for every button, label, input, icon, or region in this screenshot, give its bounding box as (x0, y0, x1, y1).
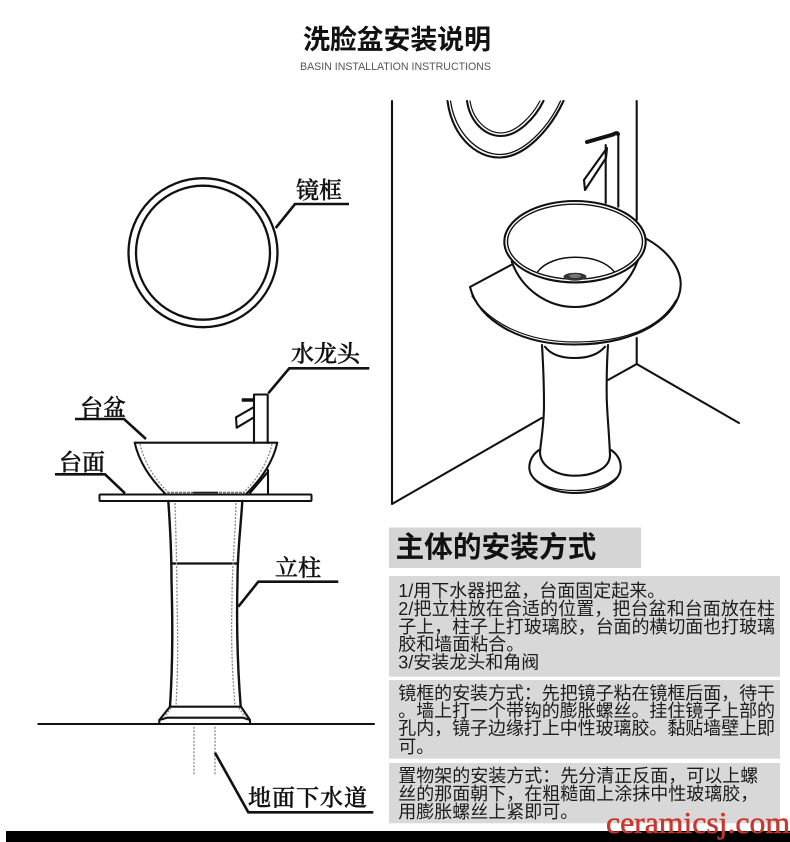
panel: mirror frame installation: 。墙上打一个带钩的膨胀螺丝。挂住镜子上部的 (398, 701, 775, 721)
panel: main body steps: 1/用下水器把盆，台面固定起来。 (398, 581, 665, 601)
panel: shelf installation: 丝的那面朝下，在粗糙面上涂抹中性玻璃胶， (398, 784, 758, 804)
panel: main body steps: 3/安装龙头和角阀 (398, 652, 539, 672)
mirror frame diagram (128, 178, 349, 327)
panel: main body steps (389, 576, 780, 677)
panel: main body steps: 子上，柱子上打玻璃胶，台面的横切面也打玻璃 (398, 617, 775, 637)
panel: shelf installation (389, 763, 780, 823)
panel: mirror frame installation: 可。 (398, 737, 434, 757)
page title: 洗脸盆安装说明 (303, 25, 491, 55)
countertop (470, 239, 681, 345)
label: mirror frame (276, 178, 349, 228)
drain pipes (194, 727, 215, 775)
label: column (238, 556, 338, 607)
subtitle: BASIN INSTALLATION INSTRUCTIONS (300, 61, 491, 73)
label: countertop: 台面 (59, 450, 105, 475)
pedestal column (159, 501, 250, 724)
perspective view: installed basin (392, 101, 739, 504)
panel: main body steps: 胶和墙面粘合。 (398, 634, 524, 654)
heading panel: main body installation: 主体的安装方式 (396, 532, 597, 564)
front view diagram: pedestal basin (38, 342, 374, 812)
panel: shelf installation: 用膨胀螺丝上紧即可。 (398, 802, 578, 822)
label: floor drain: 地面下水道 (248, 786, 367, 810)
room walls and floor (392, 101, 739, 504)
panel: main body steps: 2/把立柱放在合适的位置，把台盆和台面放在柱 (398, 599, 775, 619)
label: faucet (268, 342, 369, 393)
faucet (584, 133, 618, 207)
basin bowl (504, 201, 646, 307)
watermark: ceramicsj.com (606, 805, 790, 840)
heading panel: main body installation (389, 528, 641, 568)
label: basin (75, 396, 146, 439)
wall mirror (448, 101, 564, 158)
label: faucet: 水龙头 (291, 342, 361, 366)
basin bowl (135, 443, 277, 494)
label: mirror frame: 镜框 (296, 178, 342, 203)
label: countertop (55, 450, 125, 493)
label: floor drain (215, 753, 373, 812)
pedestal column (529, 345, 621, 493)
bottom black bar (6, 831, 790, 842)
panel: shelf installation: 置物架的安装方式：先分清正反面，可以上螺 (398, 766, 758, 786)
panel: mirror frame installation: 镜框的安装方式：先把镜子粘在镜框后面，待干 (398, 684, 775, 704)
countertop (100, 494, 312, 501)
mirror frame rings (128, 178, 278, 327)
panel: mirror frame installation (389, 680, 780, 759)
floor line (38, 723, 374, 725)
label: basin: 台盆 (80, 396, 126, 420)
faucet (236, 394, 268, 494)
panel: mirror frame installation: 孔内，镜子边缘打上中性玻璃胶。黏贴墙壁上即 (398, 718, 775, 738)
label: column: 立柱 (275, 556, 321, 580)
